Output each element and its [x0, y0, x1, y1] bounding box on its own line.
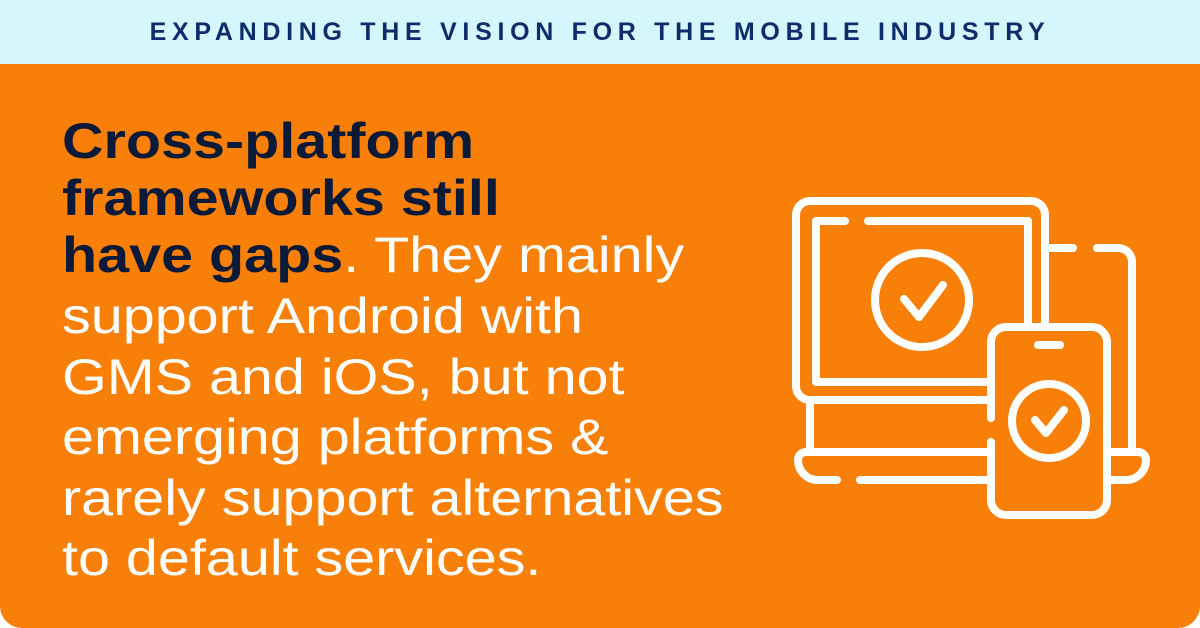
main orange panel: emerging platforms & — [62, 409, 608, 465]
screen check circle — [875, 253, 969, 347]
header band: EXPANDING THE VISION FOR THE MOBILE INDUSTRY — [150, 18, 1050, 46]
main orange panel: support Android with — [62, 288, 583, 344]
main orange panel: to default services. — [62, 530, 541, 586]
header band — [0, 0, 1200, 64]
phone — [991, 327, 1107, 515]
main orange panel: Cross-platform — [62, 113, 474, 169]
main orange panel: GMS and iOS, but not — [62, 349, 625, 405]
main orange panel: rarely support alternatives — [62, 470, 724, 526]
monitor screen — [816, 221, 1028, 382]
laptop — [810, 248, 1132, 452]
monitor outer — [796, 201, 1045, 400]
main orange panel: have gaps. They mainly — [62, 227, 684, 283]
main orange panel: frameworks still — [62, 170, 500, 226]
text block — [62, 113, 724, 586]
